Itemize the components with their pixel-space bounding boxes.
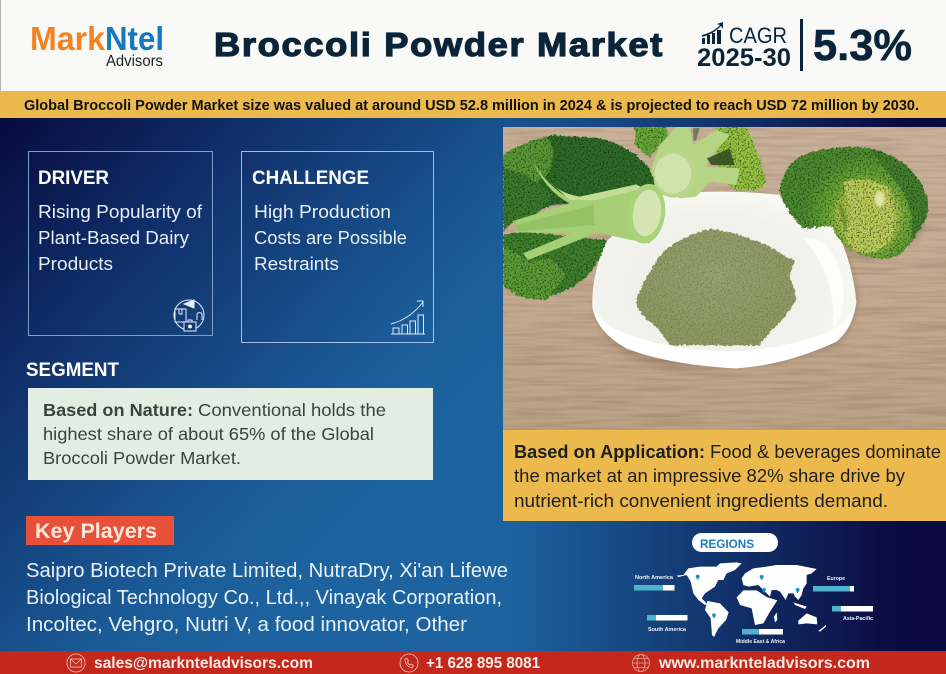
icon: growth chart [391, 301, 425, 334]
region: Asia-Pacific [832, 606, 874, 622]
footer contact bar [0, 651, 946, 674]
challenge text: Restraints [254, 253, 339, 274]
segment text: highest share of about 65% of the Global [43, 424, 374, 444]
regions map panel [634, 533, 874, 645]
logo: MarkNtel Advisors: Mark [30, 20, 106, 57]
key players list: Saipro Biotech Private Limited, NutraDry, Xi'an Lifewe [26, 560, 508, 582]
CAGR label: CAGR [729, 23, 787, 48]
divider [800, 19, 803, 71]
region: Europe: Europe [827, 576, 846, 582]
callout text: Based on Application: [514, 441, 705, 462]
driver text: Plant-Based Dairy [38, 227, 190, 248]
driver heading: DRIVER [38, 168, 109, 189]
regions pill: REGIONS [700, 537, 754, 551]
challenge text [254, 201, 407, 274]
email: sales@marknteladvisors.com [94, 655, 313, 672]
region: North America: North America [635, 575, 674, 581]
panel: driver [28, 152, 212, 336]
callout text: Food & beverages dominate [710, 441, 941, 462]
challenge heading: CHALLENGE [252, 168, 369, 189]
region: Europe [813, 576, 854, 592]
powder [636, 229, 796, 346]
dish [592, 192, 856, 368]
callout text: nutrient-rich convenient ingredients demand. [514, 490, 888, 511]
page background [0, 118, 946, 652]
region: Asia-Pacific: Asia-Pacific [843, 616, 874, 622]
website: www.marknteladvisors.com [658, 655, 870, 672]
key players list: Biological Technology Co., Ltd.,, Vinayak Corporation, [26, 587, 502, 609]
segment text: Conventional holds the [198, 400, 386, 420]
driver text [38, 201, 203, 274]
regions pill [692, 533, 778, 552]
segment text: Broccoli Powder Market. [43, 448, 241, 468]
left stem [515, 162, 665, 260]
segment text: Based on Nature: [43, 400, 193, 420]
key players heading: Key Players [35, 520, 157, 543]
segment text [43, 400, 386, 468]
region: Middle East & Africa: Middle East & Africa [736, 639, 786, 645]
icon: market globe [174, 300, 204, 331]
top stalks [651, 127, 740, 198]
region: Middle East & Africa [736, 629, 786, 645]
driver text: Rising Popularity of [38, 201, 203, 222]
top stem cut [652, 151, 696, 198]
region: North America [634, 575, 674, 590]
driver text: Products [38, 253, 113, 274]
CAGR block [697, 19, 912, 72]
title: Broccoli Powder Market [214, 26, 664, 63]
region: South America: South America [648, 627, 687, 633]
shadows [593, 222, 926, 371]
region: South America [647, 615, 688, 633]
logo: MarkNtel Advisors: Advisors [106, 53, 163, 70]
key players list [26, 560, 508, 636]
summary banner [0, 91, 946, 118]
years: 2025-30 [697, 44, 791, 72]
key players list: Incoltec, Vehgro, Nutri V, a food innovator, Other [26, 614, 467, 636]
challenge text: High Production [254, 201, 391, 222]
left stem cut [636, 184, 666, 244]
right broccoli [780, 147, 928, 259]
icon: rising bars [702, 22, 723, 44]
logo: MarkNtel Advisors: Ntel [105, 20, 164, 57]
header band [0, 0, 946, 91]
left broccoli [503, 135, 655, 300]
callout text: the market at an impressive 82% share drive by [514, 465, 906, 486]
logo: MarkNtel Advisors [30, 20, 164, 70]
challenge text: Costs are Possible [254, 227, 407, 248]
key players heading [26, 516, 174, 545]
segment heading: SEGMENT [26, 360, 119, 381]
panel: application callout [503, 430, 946, 521]
phone: +1 628 895 8081 [426, 655, 540, 672]
summary banner: Global Broccoli Powder Market size was valued at around USD 52.8 million in 2024 & is projected to reach USD 72 million by 2030. [24, 97, 919, 114]
photo: broccoli and powder in a white dish [503, 125, 946, 430]
world map [677, 562, 826, 637]
panel: challenge [242, 152, 434, 342]
callout text [514, 441, 941, 511]
top broccoli [635, 127, 766, 190]
panel: segment [28, 388, 433, 480]
map pins [696, 575, 800, 619]
value: 5.3% [813, 21, 912, 70]
